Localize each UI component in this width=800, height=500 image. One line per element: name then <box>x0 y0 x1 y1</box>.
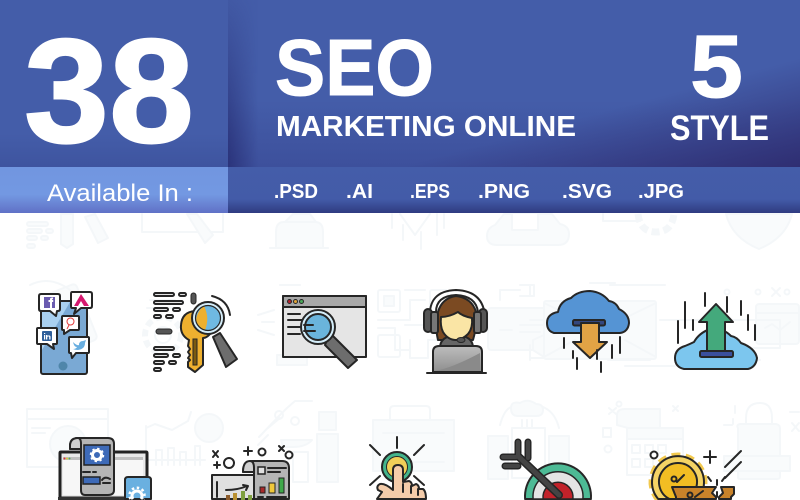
style count: 5 <box>690 16 743 116</box>
format labels <box>274 181 684 203</box>
format labels: .PSD <box>274 181 318 203</box>
icon: browser with magnifier <box>283 296 366 368</box>
title: SEO <box>275 23 434 112</box>
panel: right header <box>228 0 800 167</box>
icon: analytics report <box>212 446 292 500</box>
format labels: .SVG <box>562 181 612 203</box>
format labels: .PNG <box>478 181 530 203</box>
panel: left availability strip <box>0 167 228 213</box>
panel: left header <box>0 0 228 167</box>
icon: phone with social bubbles <box>37 292 92 374</box>
style label: STYLE <box>670 109 769 148</box>
panel: right format strip <box>228 167 800 213</box>
format labels: .JPG <box>638 181 684 203</box>
format labels: .EPS <box>410 181 450 203</box>
background ghost icons <box>27 214 799 482</box>
ghost row three <box>27 401 799 482</box>
icon: discount gear and coupon <box>650 451 741 499</box>
availability label: Available In : <box>47 180 193 207</box>
panel: right header corner shade <box>228 0 800 167</box>
icon: hand tapping button <box>370 437 426 499</box>
icon: support agent with headset <box>424 290 487 373</box>
icon: target with arrow <box>503 442 591 499</box>
header banner <box>0 0 800 213</box>
ghost row two <box>30 281 799 366</box>
ghost row one <box>27 214 792 249</box>
icon: responsive devices with settings <box>58 438 151 500</box>
icon: cloud download <box>547 291 629 372</box>
panel: header inner shadow <box>228 14 252 167</box>
format labels: .AI <box>346 181 373 203</box>
subtitle: MARKETING ONLINE <box>276 111 576 143</box>
icon: key with magnifier <box>154 293 237 372</box>
icon count: 38 <box>24 9 194 174</box>
icon: cloud upload <box>675 293 757 369</box>
